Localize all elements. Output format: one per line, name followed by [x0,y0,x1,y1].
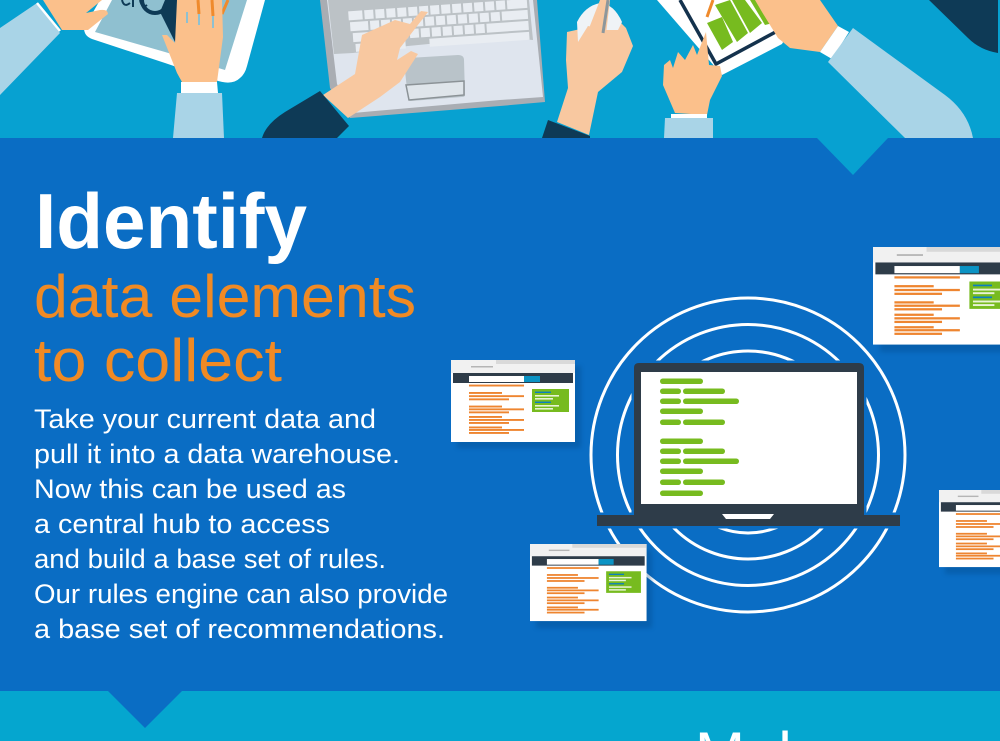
top desk illustration [0,0,1000,139]
dark corner shape [929,0,998,53]
laptop keyboard [320,0,545,118]
laptop hand [262,11,428,138]
mouse hand [542,0,633,138]
left tablet [84,0,265,83]
body text [34,404,448,644]
body text: Now this can be used as [34,474,346,504]
browser window: bottom [530,544,652,628]
body text: a central hub to access [34,509,330,539]
subheading [34,263,416,394]
right tablet with bar chart [657,0,790,75]
bottom teal band [0,691,1000,741]
body text: pull it into a data warehouse. [34,439,400,469]
upper right hand and sleeve [755,0,973,138]
centre hand on tablet [162,0,224,138]
subheading: data elements [34,263,416,330]
main blue panel [0,138,1000,691]
laptop with code [597,363,900,526]
browser window: right [939,490,1000,574]
concentric signal rings [591,298,905,612]
body text: and build a base set of rules. [34,544,386,574]
subheading: to collect [34,327,282,394]
finger gaps [187,8,213,28]
heading: Identify: Identify [35,177,307,265]
laptop body [597,363,900,526]
browser window: left [451,360,581,448]
body text: Take your current data and [34,404,376,434]
body text: Our rules engine can also provide [34,579,448,609]
lower right hand [663,32,722,138]
browser window: top right [873,247,1000,352]
bottom notch [108,691,182,728]
left sleeve and hand [0,0,108,95]
body text: a base set of recommendations. [34,614,445,644]
code lines [660,378,739,496]
top notch [817,138,888,175]
